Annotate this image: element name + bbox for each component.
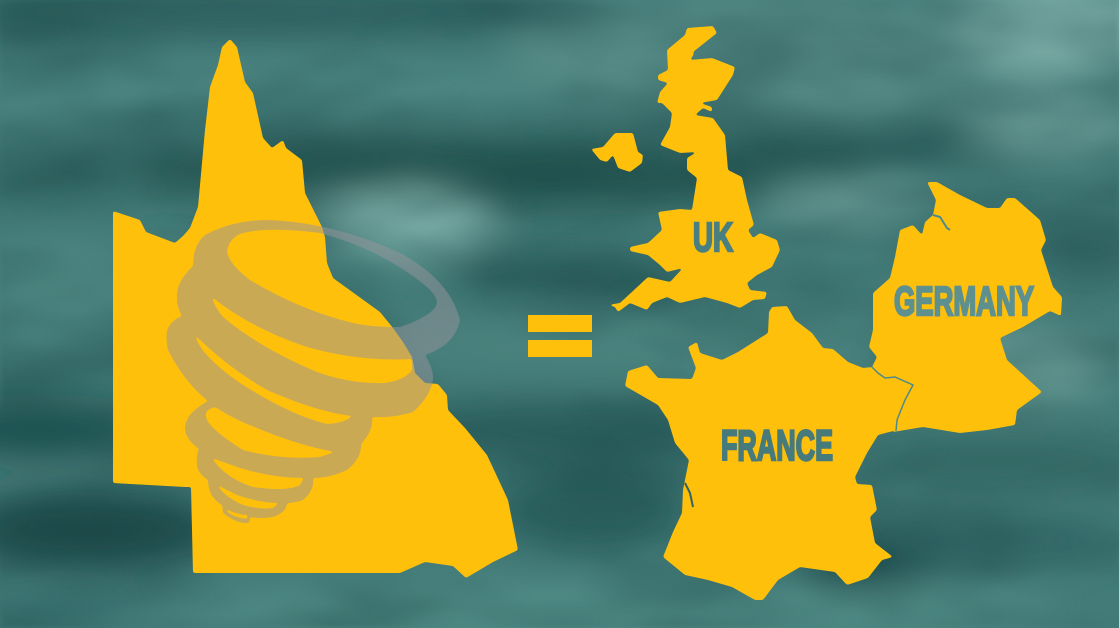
rivers — [685, 215, 950, 507]
label: FRANCE: FRANCE — [721, 422, 833, 470]
icon: tornado — [166, 220, 460, 523]
Great Britain — [608, 26, 780, 312]
label: GERMANY: GERMANY — [894, 278, 1034, 324]
map: Germany — [869, 182, 1062, 433]
map: Queensland — [113, 39, 518, 578]
Queensland map with tornado — [113, 39, 518, 578]
map: France — [625, 306, 913, 600]
equals sign — [528, 315, 592, 357]
label: UK: UK — [693, 214, 733, 260]
map: UK — [591, 26, 780, 312]
France shape — [625, 306, 913, 600]
Northern Ireland — [591, 133, 643, 172]
Germany shape — [869, 182, 1062, 433]
